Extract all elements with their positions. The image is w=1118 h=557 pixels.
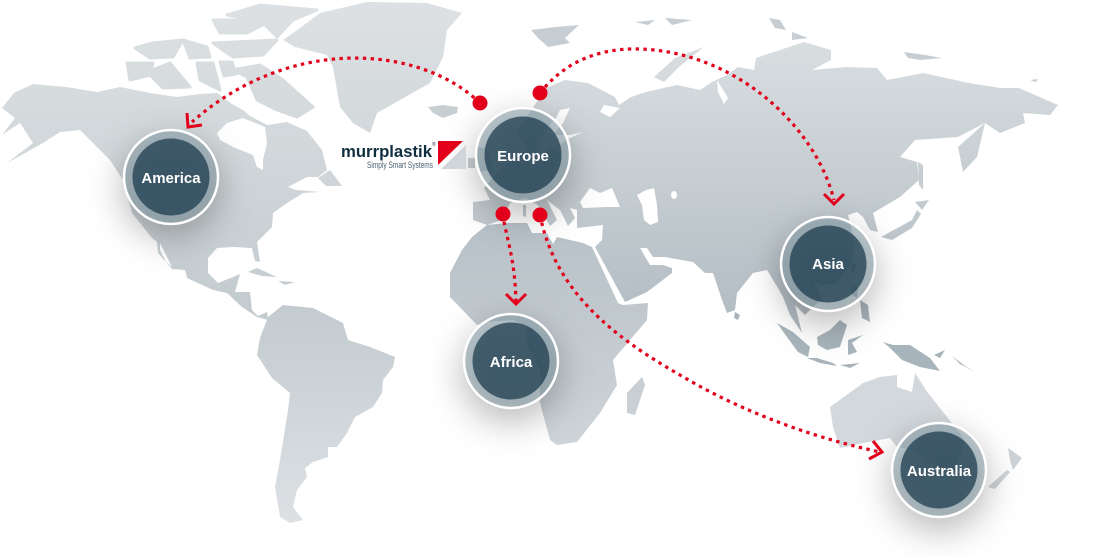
islands: Southeast Asia xyxy=(734,263,975,372)
logo: murrplastik xyxy=(341,141,466,170)
water: Hudson Bay and Gulf of California xyxy=(160,118,267,267)
node: Asia: Asia xyxy=(812,256,844,273)
arrow: Europe to Asia xyxy=(532,49,844,204)
node: Europe xyxy=(476,108,570,202)
water: inland seas xyxy=(535,80,728,225)
islands: Canadian Arctic xyxy=(127,5,317,117)
arctic islands xyxy=(531,18,1038,82)
continent: Greenland xyxy=(283,2,462,133)
node: Africa: Africa xyxy=(490,354,533,371)
arrow: Europe to Africa xyxy=(496,206,526,304)
island: Iceland xyxy=(428,105,458,118)
continent: Eurasia xyxy=(468,42,1058,333)
circle shadows xyxy=(121,117,989,532)
islands: New Zealand xyxy=(988,448,1022,489)
node: Australia: Australia xyxy=(907,463,972,480)
node: Africa xyxy=(464,314,558,408)
continent: South America xyxy=(257,305,395,523)
continent: Australia xyxy=(830,373,965,470)
arrow: Europe to Australia xyxy=(532,208,882,459)
registered mark: ® xyxy=(432,141,436,148)
logo tagline: Simply Smart Systems xyxy=(367,160,433,170)
logo mark xyxy=(438,141,466,169)
node: Europe: Europe xyxy=(497,148,549,165)
arrow: Europe to America xyxy=(187,58,488,127)
continent: North America xyxy=(2,84,342,320)
node: America: America xyxy=(141,170,201,187)
node: America xyxy=(124,130,218,224)
logo wordmark: murrplastik xyxy=(341,142,433,161)
node: Australia xyxy=(892,423,986,517)
node: Asia xyxy=(781,217,875,311)
continent: Africa xyxy=(450,223,648,445)
